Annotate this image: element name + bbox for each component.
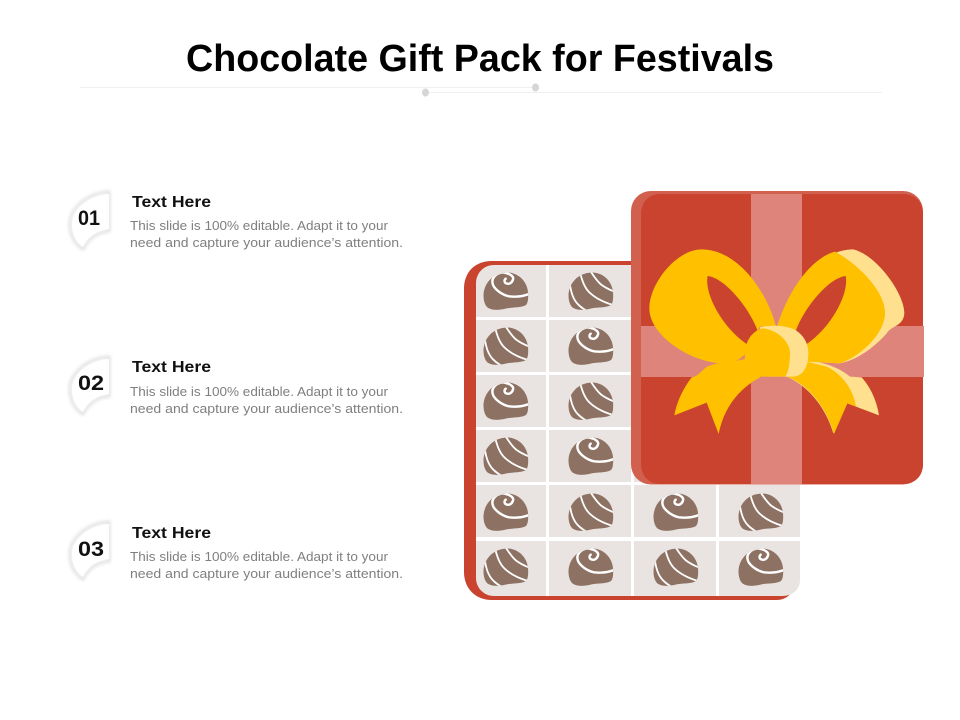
right tail [787, 362, 856, 434]
heading 01: Text Here [132, 194, 211, 211]
chocolate tray [464, 261, 800, 600]
body 02: This slide is 100% editable. Adapt it to your [130, 384, 389, 399]
left loop hole [707, 276, 757, 344]
body 03: This slide is 100% editable. Adapt it to your [130, 549, 389, 564]
body 01: need and capture your audience’s attention. [130, 235, 403, 250]
ribbon vertical [751, 194, 802, 484]
right loop hole [796, 276, 846, 344]
badge 01 [70, 192, 109, 249]
title: Chocolate Gift Pack for Festivals [186, 38, 774, 80]
gift box lid [631, 191, 924, 484]
item 01 [70, 192, 403, 250]
knot highlight [760, 326, 808, 377]
item 02 [70, 357, 403, 416]
badge 02 [70, 357, 109, 414]
title divider [80, 84, 882, 96]
tray base [464, 261, 792, 600]
tray grid [476, 265, 800, 596]
badge 03: 03 [78, 538, 104, 561]
left tail [674, 358, 767, 434]
tray liner [476, 265, 800, 596]
body 02: need and capture your audience’s attention. [130, 401, 403, 416]
left loop [649, 249, 776, 363]
lid shadow edge [631, 191, 923, 484]
knot [745, 328, 790, 377]
right loop [777, 252, 885, 363]
item 03 [70, 522, 403, 581]
heading 02: Text Here [132, 359, 211, 376]
right loop highlight [777, 249, 904, 363]
body 01: This slide is 100% editable. Adapt it to your [130, 218, 389, 233]
ribbon horizontal [641, 326, 924, 377]
badge 03 [70, 522, 109, 579]
bow [649, 249, 904, 434]
right tail highlight [787, 359, 879, 433]
chocolates [484, 272, 784, 587]
heading 03: Text Here [132, 525, 211, 542]
badge 02: 02 [78, 372, 104, 395]
badge 01: 01 [78, 207, 100, 230]
lid face [641, 194, 923, 484]
body 03: need and capture your audience’s attention. [130, 566, 403, 581]
